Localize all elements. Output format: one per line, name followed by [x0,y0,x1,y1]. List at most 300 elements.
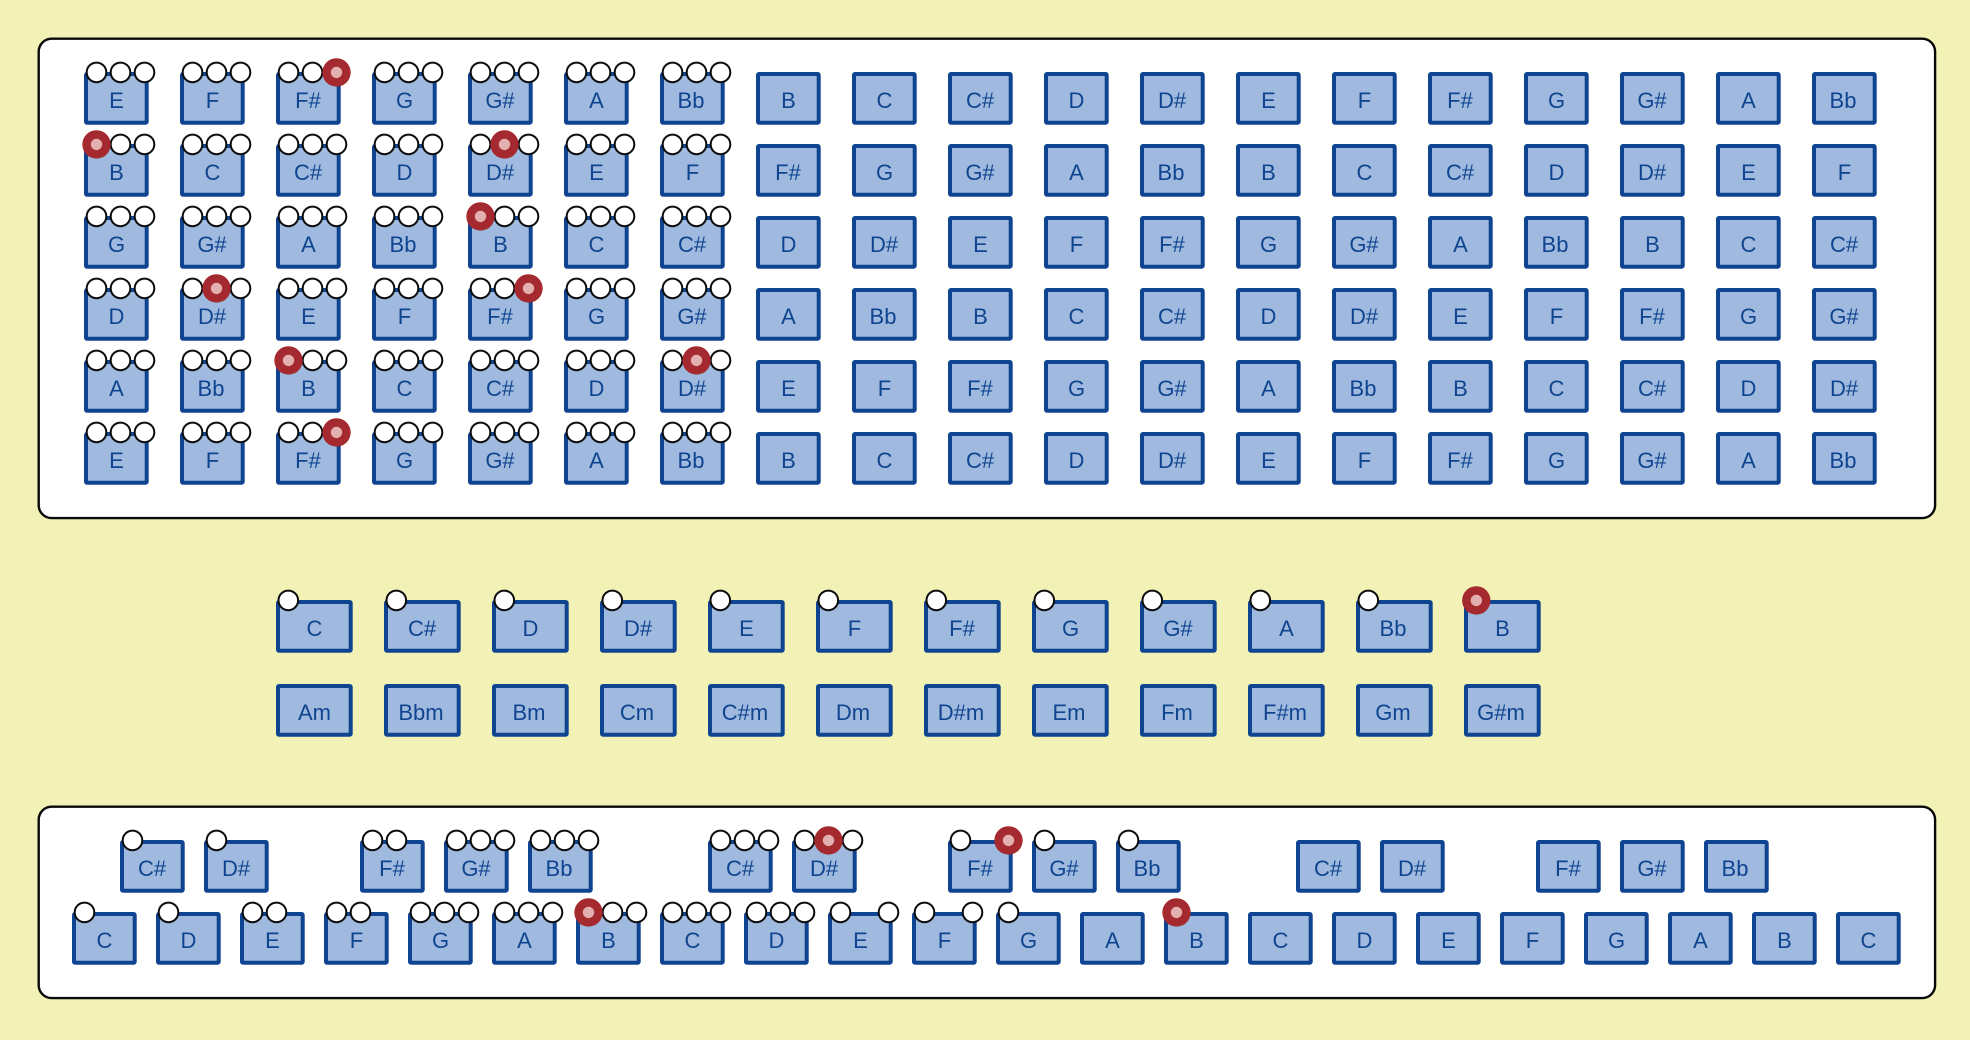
key: D minor: Dm [836,700,870,725]
key: upper G# octave 3 [1622,842,1683,891]
key: E [758,362,819,411]
key: lower B octave 3: B [1777,928,1792,953]
key: D#: D# [1638,160,1667,185]
key: G# [1622,434,1683,483]
key: D [1046,74,1107,123]
key: G, row 3 fret 0 [86,207,154,267]
key: G minor [1358,686,1431,735]
key: C# [1814,218,1875,267]
panel: piano keyboard notes [39,807,1935,998]
key: C: C [1549,376,1565,401]
key: C [1718,218,1779,267]
key: lower C: C [97,928,113,953]
key: F [1814,146,1875,195]
key: G [1238,218,1299,267]
key: G: G [1068,376,1085,401]
key: lower G: G [432,928,449,953]
key: D#: D# [1158,88,1187,113]
key: D [1718,362,1779,411]
key: upper G# octave 3: G# [1637,856,1667,881]
key: F, row 6 fret 1: F [206,448,219,473]
key: Bb, row 5 fret 1: Bb [198,376,224,401]
key: Bb, row 6 fret 6: Bb [678,448,704,473]
key: Bb: Bb [1542,232,1568,257]
key: lower F octave 2: F [938,928,951,953]
key: A [1238,362,1299,411]
key: A: A [1453,232,1468,257]
key: E: E [781,376,796,401]
key: D, row 5 fret 5 [566,351,634,411]
key: lower B octave 2, red first marker [1162,898,1227,963]
key: C [854,434,915,483]
key: F, row 6 fret 1 [182,423,250,483]
key: G#: G# [1637,88,1667,113]
key: G#, row 1 fret 4: G# [485,88,515,113]
key: E: E [1261,88,1276,113]
key: A, row 5 fret 0 [86,351,154,411]
key: C# minor [710,686,783,735]
key: E, row 1 fret 0: E [109,88,124,113]
key: lower D [158,903,219,963]
key: lower E [242,903,303,963]
key: Bb: Bb [1830,448,1856,473]
key: E, row 2 fret 5: E [589,160,604,185]
key: D#, row 4 fret 1, red middle marker [182,274,250,339]
key: upper C# octave 2 [710,831,778,891]
key: D: D [1741,376,1756,401]
key: C, row 3 fret 5 [566,207,634,267]
key: B [1622,218,1683,267]
key: D: D [1261,304,1276,329]
key: C#, row 3 fret 6 [662,207,730,267]
key: A, row 6 fret 5: A [589,448,604,473]
key: upper C#: C# [138,856,167,881]
key: F#, row 4 fret 4, red third marker: F# [487,304,514,329]
key: E: E [1741,160,1756,185]
key: D [1238,290,1299,339]
key: E, row 2 fret 5 [566,135,634,195]
key: F# [1430,434,1491,483]
key: B minor [494,686,567,735]
key: D, row 4 fret 0: D [109,304,124,329]
key: F#: F# [1447,88,1474,113]
key: A [1718,74,1779,123]
key: lower D octave 2: D [769,928,784,953]
key: G#: G# [1349,232,1379,257]
key: F minor: Fm [1161,700,1193,725]
key: G# [1334,218,1395,267]
key: D, row 5 fret 5: D [589,376,604,401]
key: C#, row 5 fret 4 [470,351,538,411]
key: F, row 1 fret 1: F [206,88,219,113]
key: A [1718,434,1779,483]
key: G#, row 6 fret 4: G# [485,448,515,473]
key: B: B [781,88,796,113]
key: A minor: Am [298,700,331,725]
key: E major: E [739,616,754,641]
key: D#, row 5 fret 6, red middle marker: D# [678,376,707,401]
key: B: B [1645,232,1660,257]
key: upper Bb octave 3: Bb [1722,856,1748,881]
key: upper G# octave 2: G# [1049,856,1079,881]
key: A: A [1741,448,1756,473]
key: G#: G# [1829,304,1859,329]
key: upper D# [206,831,267,891]
key: G#, row 4 fret 6 [662,279,730,339]
key: C#: C# [1446,160,1475,185]
key: C: C [1741,232,1757,257]
key: A, row 3 fret 2: A [301,232,316,257]
key: F minor [1142,686,1215,735]
key: F [1334,74,1395,123]
key: upper G# octave 2 [1034,831,1095,891]
key: A [1046,146,1107,195]
key: Bb, row 5 fret 1 [182,351,250,411]
key: lower E octave 2 [830,903,898,963]
key: B, row 3 fret 4, red first marker: B [493,232,508,257]
key: C#, row 5 fret 4: C# [486,376,515,401]
key: G, row 6 fret 3: G [396,448,413,473]
key: lower C [74,903,135,963]
key: upper Bb octave 2 [1118,831,1179,891]
key: G#, row 1 fret 4 [470,63,538,123]
key: D [1046,434,1107,483]
key: Bb major: Bb [1380,616,1406,641]
key: lower D: D [181,928,196,953]
key: F# [1430,74,1491,123]
key: G# [950,146,1011,195]
key: B [758,74,819,123]
key: C major: C [307,616,323,641]
key: B, row 2 fret 0, red first marker: B [109,160,124,185]
key: G [1718,290,1779,339]
key: F, row 4 fret 3: F [398,304,411,329]
key: G# minor: G#m [1477,700,1525,725]
key: C, row 5 fret 3 [374,351,442,411]
key: Bb major [1358,591,1431,651]
key: E, row 6 fret 0: E [109,448,124,473]
key: F: F [1550,304,1563,329]
key: D#: D# [1158,448,1187,473]
key: B, row 3 fret 4, red first marker [466,202,538,267]
key: A, row 1 fret 5 [566,63,634,123]
key: F#, row 4 fret 4, red third marker [470,274,543,339]
key: lower G octave 2: G [1020,928,1037,953]
key: B: B [781,448,796,473]
key: B [950,290,1011,339]
key: D# [1142,434,1203,483]
key: C#: C# [1638,376,1667,401]
key: lower A octave 3: A [1693,928,1708,953]
key: G minor: Gm [1375,700,1411,725]
key: C# [950,434,1011,483]
key: lower E octave 3 [1418,914,1479,963]
key: upper Bb octave 3 [1706,842,1767,891]
key: G, row 3 fret 0: G [108,232,125,257]
key: D# major [602,591,675,651]
key: Bb [854,290,915,339]
key: C# [1430,146,1491,195]
key: lower C octave 4: C [1861,928,1877,953]
key: upper Bb octave 2: Bb [1134,856,1160,881]
key: F [1526,290,1587,339]
key: D#: D# [1830,376,1859,401]
key: G# major [1142,591,1215,651]
key: E minor: Em [1052,700,1086,725]
key: lower C octave 4 [1838,914,1899,963]
key: lower E octave 2: E [853,928,868,953]
key: F#: F# [1159,232,1186,257]
key: upper F# octave 2, red third marker [950,826,1023,891]
key: lower C octave 2: C [685,928,701,953]
key: G# minor [1466,686,1539,735]
key: D# minor: D#m [938,700,984,725]
key: A, row 6 fret 5 [566,423,634,483]
key: lower A: A [517,928,532,953]
key: D: D [1069,448,1084,473]
key: lower G octave 2 [998,903,1059,963]
key: lower B octave 3 [1754,914,1815,963]
key: D#: D# [870,232,899,257]
key: F: F [878,376,891,401]
key: C: C [1069,304,1085,329]
key: B [758,434,819,483]
key: lower G [410,903,478,963]
key: upper F# octave 3: F# [1555,856,1582,881]
key: E [950,218,1011,267]
key: D# [1814,362,1875,411]
key: C# [1622,362,1683,411]
key: upper C# octave 3: C# [1314,856,1343,881]
key: D minor [818,686,891,735]
key: D# major: D# [624,616,653,641]
key: A major: A [1279,616,1294,641]
key: upper D# octave 2, red middle marker [794,826,862,891]
key: upper G# [446,831,514,891]
key: lower F [326,903,387,963]
key: Bb: Bb [1158,160,1184,185]
key: Bb, row 3 fret 3 [374,207,442,267]
key: D#: D# [1350,304,1379,329]
key: G#, row 3 fret 1: G# [197,232,227,257]
key: C#, row 2 fret 2 [278,135,346,195]
key: C, row 5 fret 3: C [397,376,413,401]
key: B major, red marker [1462,586,1539,651]
key: lower G octave 3 [1586,914,1647,963]
key: G major [1034,591,1107,651]
key: G: G [1740,304,1757,329]
key: D# [854,218,915,267]
key: B, row 2 fret 0, red first marker [82,130,154,195]
key: upper D# octave 3: D# [1398,856,1427,881]
key: C# [950,74,1011,123]
key: lower D octave 3 [1334,914,1395,963]
key: A, row 1 fret 5: A [589,88,604,113]
key: A, row 3 fret 2 [278,207,346,267]
key: D# [1142,74,1203,123]
key: lower B, red first marker [574,898,646,963]
key: Bb, row 6 fret 6 [662,423,730,483]
key: G#, row 3 fret 1 [182,207,250,267]
key: C#: C# [966,448,995,473]
key: G# [1622,74,1683,123]
key: lower A octave 2 [1082,914,1143,963]
key: D, row 4 fret 0 [86,279,154,339]
key: lower C octave 3: C [1273,928,1289,953]
key: F# major: F# [949,616,976,641]
key: Bb: Bb [1350,376,1376,401]
key: F# [1622,290,1683,339]
key: upper D#: D# [222,856,251,881]
key: E: E [1261,448,1276,473]
key: B, row 5 fret 2, red first marker: B [301,376,316,401]
key: B, row 5 fret 2, red first marker [274,346,346,411]
key: lower C octave 3 [1250,914,1311,963]
key: G# [1814,290,1875,339]
key: B [1238,146,1299,195]
key: C minor [602,686,675,735]
key: E [1238,74,1299,123]
key: F: F [1358,448,1371,473]
key: G#: G# [1637,448,1667,473]
key: F#, row 6 fret 2, red third marker: F# [295,448,322,473]
key: G: G [1260,232,1277,257]
key: B: B [1261,160,1276,185]
key: D#, row 5 fret 6, red middle marker [662,346,730,411]
key: F# minor [1250,686,1323,735]
key: D#, row 2 fret 4, red middle marker [470,130,538,195]
key: C: C [1357,160,1373,185]
key: Bb: Bb [1830,88,1856,113]
key: upper D# octave 2, red middle marker: D# [810,856,839,881]
key: F major: F [848,616,861,641]
key: D# [1622,146,1683,195]
key: E major [710,591,783,651]
key: E, row 6 fret 0 [86,423,154,483]
key: F, row 1 fret 1 [182,63,250,123]
key: Bb [1814,434,1875,483]
key: C [854,74,915,123]
key: F#: F# [1639,304,1666,329]
key: F: F [1070,232,1083,257]
key: B major, red marker: B [1495,616,1510,641]
key: C# [1142,290,1203,339]
key: G#, row 6 fret 4 [470,423,538,483]
key: F# minor: F#m [1263,700,1307,725]
key: G#, row 4 fret 6: G# [677,304,707,329]
key: C#, row 3 fret 6: C# [678,232,707,257]
key: upper C# [122,831,183,891]
key: B minor: Bm [512,700,546,725]
key: F# [1142,218,1203,267]
key: C [1046,290,1107,339]
key: F [1046,218,1107,267]
key: D# minor [926,686,999,735]
key: lower A [494,903,562,963]
key: E, row 4 fret 2 [278,279,346,339]
key: F [854,362,915,411]
key: lower D octave 2 [746,903,814,963]
key: B: B [973,304,988,329]
key: D major: D [523,616,538,641]
key: G#: G# [1157,376,1187,401]
key: F#, row 6 fret 2, red third marker [278,418,351,483]
key: B [1430,362,1491,411]
key: C#: C# [1830,232,1859,257]
key: lower E octave 3: E [1441,928,1456,953]
key: A [758,290,819,339]
key: lower F octave 3: F [1526,928,1539,953]
key: Bb [1334,362,1395,411]
key: upper D# octave 3 [1382,842,1443,891]
key: lower C octave 2 [662,903,730,963]
key: C minor: Cm [620,700,654,725]
key: lower F octave 2 [914,903,982,963]
key: D [1526,146,1587,195]
key: G [854,146,915,195]
key: upper C# octave 2: C# [726,856,755,881]
key: Bb, row 3 fret 3: Bb [390,232,416,257]
key: E [1238,434,1299,483]
key: C# major [386,591,459,651]
key: G: G [1548,88,1565,113]
key: G, row 1 fret 3: G [396,88,413,113]
key: E, row 1 fret 0 [86,63,154,123]
key: upper G#: G# [461,856,491,881]
key: Bb minor: Bbm [398,700,444,725]
key: A: A [1741,88,1756,113]
key: D: D [781,232,796,257]
key: F# major [926,591,999,651]
key: G# major: G# [1163,616,1193,641]
key: C: C [877,448,893,473]
key: F#: F# [1447,448,1474,473]
key: E: E [973,232,988,257]
key: C#: C# [1158,304,1187,329]
key: C [1526,362,1587,411]
key: C, row 2 fret 1 [182,135,250,195]
key: G [1526,74,1587,123]
key: E [1718,146,1779,195]
key: D: D [1069,88,1084,113]
key: G: G [876,160,893,185]
key: C#, row 2 fret 2: C# [294,160,323,185]
key: E: E [1453,304,1468,329]
key: C: C [877,88,893,113]
key: E minor [1034,686,1107,735]
key: Bb: Bb [870,304,896,329]
key: D#, row 4 fret 1, red middle marker: D# [198,304,227,329]
key: F, row 4 fret 3 [374,279,442,339]
key: A: A [1261,376,1276,401]
key: F, row 2 fret 6: F [686,160,699,185]
key: F# [758,146,819,195]
key: F major [818,591,891,651]
key: F#, row 1 fret 2, red third marker: F# [295,88,322,113]
key: F# [950,362,1011,411]
key: F [1334,434,1395,483]
key: upper F#: F# [379,856,406,881]
key: lower D octave 3: D [1357,928,1372,953]
key: A: A [1069,160,1084,185]
key: G, row 1 fret 3 [374,63,442,123]
key: Bb minor [386,686,459,735]
key: E [1430,290,1491,339]
key: A major [1250,591,1323,651]
key: D# [1334,290,1395,339]
key: upper F# [362,831,423,891]
key: upper F# octave 3 [1538,842,1599,891]
